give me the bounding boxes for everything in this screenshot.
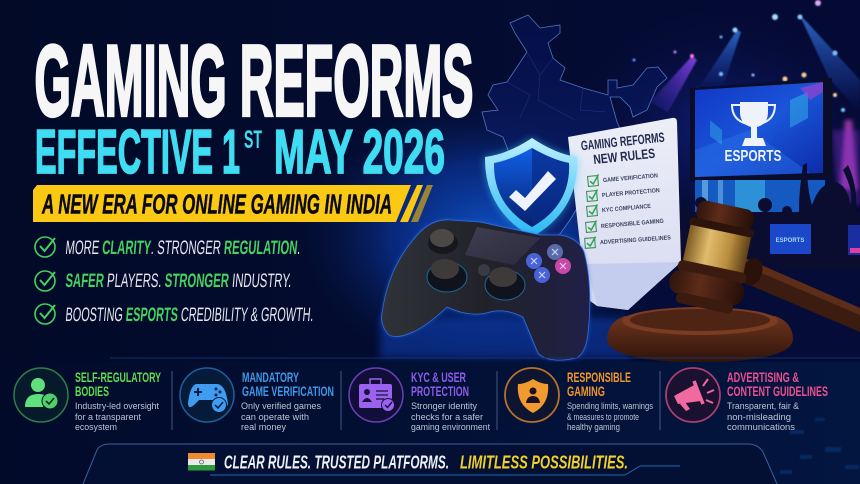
sound block [607, 307, 793, 363]
yellow tagline banner: A NEW ERA FOR ONLINE GAMING IN INDIA [41, 188, 392, 220]
icon: gamepad check [180, 368, 234, 422]
feature: KYC and user protection: Stronger identity [411, 401, 477, 411]
feature: KYC and user protection [349, 368, 490, 432]
feature: responsible gaming: healthy gaming [567, 422, 620, 432]
benefit 1: MORE CLARITY. STRONGER REGULATION. [65, 237, 301, 259]
checklist: RESPONSIBLE GAMING [601, 219, 664, 230]
touchpad [465, 227, 540, 265]
feature: advertising and content guidelines: communications [727, 422, 796, 432]
icon: orange shield [505, 368, 559, 422]
bottom slogan banner: CLEAR RULES. TRUSTED PLATFORMS. [224, 452, 449, 472]
feature: advertising and content guidelines [666, 368, 828, 432]
icon: Indian flag [188, 453, 215, 470]
esports screen label: ESPORTS [724, 148, 782, 165]
bottom slogan banner: LIMITLESS POSSIBILITIES. [460, 452, 628, 472]
document heading [580, 130, 667, 168]
gavel [607, 197, 860, 363]
lit stage strip [695, 180, 825, 222]
feature: self-regulatory bodies: for a transparent [75, 412, 141, 422]
small monitors [770, 224, 860, 255]
subtitle: effective date: EFFECTIVE 1 [35, 118, 240, 187]
feature: self-regulatory bodies: SELF-REGULATORY [75, 369, 161, 385]
checklist: GAME VERIFICATION [603, 173, 658, 184]
key benefits list [35, 237, 314, 326]
feature: KYC and user protection: PROTECTION [411, 383, 469, 399]
audience silhouettes [680, 163, 860, 270]
document heading: NEW RULES [593, 146, 656, 167]
gavel handle [740, 258, 860, 332]
benefit 2: SAFER PLAYERS. STRONGER INDUSTRY. [65, 270, 292, 292]
feature: mandatory game verification: MANDATORY [242, 369, 299, 385]
checklist: ADVERTISING GUIDELINES [600, 235, 671, 246]
trophy icon [732, 102, 775, 146]
feature: advertising and content guidelines: Transparent, fair & [727, 401, 799, 411]
document heading: GAMING REFORMS [580, 130, 665, 153]
map of India outline [482, 15, 667, 262]
feature: responsible gaming: & measures to promote [567, 412, 639, 422]
feature: mandatory game verification [180, 368, 334, 432]
icon: ID badge [349, 368, 403, 422]
stage light beams [632, 0, 860, 205]
feature: KYC and user protection: gaming environment [411, 422, 490, 432]
feature: self-regulatory bodies: Industry-led oversight [75, 401, 159, 411]
icon: megaphone [666, 368, 720, 422]
feature: advertising and content guidelines: ADVERTISING & [727, 369, 799, 385]
big screen [695, 82, 823, 177]
feature: self-regulatory bodies [14, 368, 161, 432]
feature: mandatory game verification: GAME VERIFICATION [242, 383, 334, 399]
bottom slogan banner [83, 444, 777, 484]
benefit 3: BOOSTING ESPORTS CREDIBILITY & GROWTH. [65, 304, 314, 326]
icon: verified person [14, 368, 68, 422]
feature: mandatory game verification: real money [241, 422, 286, 432]
big screen frame [690, 78, 832, 182]
feature: responsible gaming: RESPONSIBLE [567, 369, 631, 385]
shield with check [485, 138, 577, 237]
benefit 3 [35, 304, 314, 326]
feature: KYC and user protection: checks for a safer [411, 412, 483, 422]
face buttons [526, 244, 571, 283]
feature: KYC and user protection: KYC & USER [411, 369, 466, 385]
lower band background [0, 358, 860, 484]
subtitle: effective date: MAY 2026 [274, 118, 445, 187]
subtitle: effective date: ST [244, 126, 262, 154]
feature: mandatory game verification: can operate with [241, 412, 309, 422]
small monitors: ESPORTS [776, 238, 804, 244]
stage scene: esports arena [632, 0, 860, 270]
feature: self-regulatory bodies: ecosystem [75, 422, 117, 432]
feature: responsible gaming [505, 368, 653, 432]
checklist [585, 169, 671, 248]
checklist: PLAYER PROTECTION [602, 188, 660, 199]
feature: self-regulatory bodies: BODIES [75, 383, 109, 399]
feature: mandatory game verification: Only verified games [241, 401, 321, 411]
feature: advertising and content guidelines: non-misleading [727, 412, 791, 422]
feature: responsible gaming: GAMING [567, 383, 605, 399]
checklist: KYC COMPLIANCE [602, 204, 651, 214]
gavel head [665, 197, 762, 316]
game controller [382, 220, 590, 360]
thumbsticks [427, 229, 525, 300]
yellow tagline banner [33, 185, 433, 222]
rules document [568, 118, 681, 310]
feature: responsible gaming: Spending limits, warnings [567, 401, 653, 411]
